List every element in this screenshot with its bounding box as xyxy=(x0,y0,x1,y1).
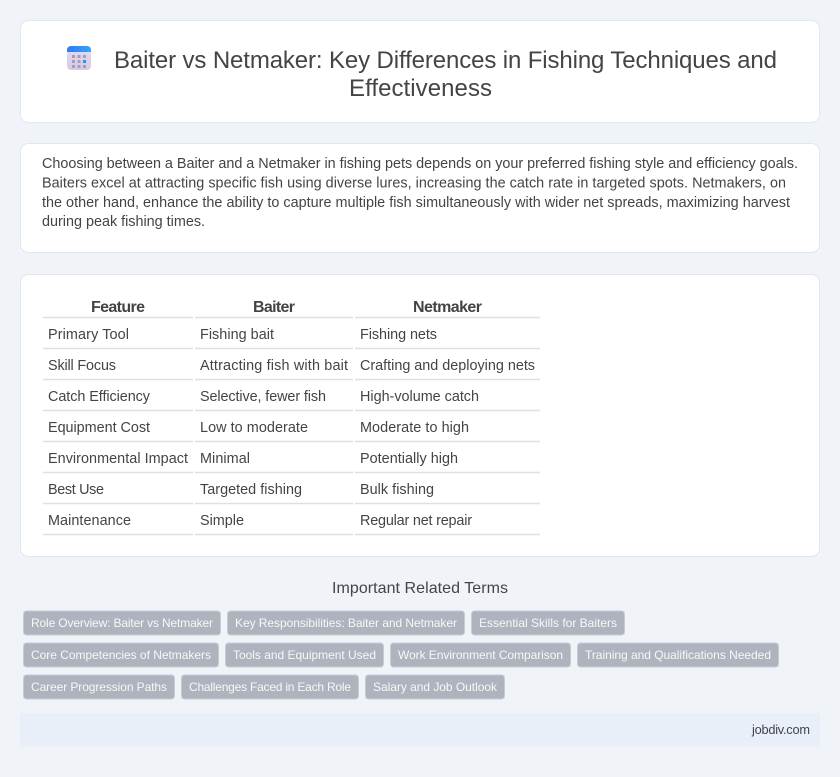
row: skill focus xyxy=(48,358,535,374)
footer source: jobdiv.com xyxy=(751,722,810,737)
tag: tools and equipment xyxy=(226,643,384,667)
row: best use xyxy=(48,482,434,498)
intro paragraph: during peak fishing times. xyxy=(42,214,205,230)
row: equipment cost xyxy=(48,420,469,436)
tag: salary: Salary and Job Outlook xyxy=(373,680,498,694)
intro text panel xyxy=(20,144,820,252)
row: skill focus: Attracting fish with bait xyxy=(200,358,348,374)
intro paragraph: the other hand, enhance the ability to capture multiple fish simultaneously with wider net spreads, maximizing harvest xyxy=(42,195,790,211)
tag: key responsibilities: Key Responsibilities: Baiter and Netmaker xyxy=(235,616,457,630)
row: equipment cost: Equipment Cost xyxy=(48,420,150,436)
row: environmental impact: Minimal xyxy=(200,451,250,467)
tag: role overview xyxy=(24,611,220,635)
tag: essential skills xyxy=(472,611,624,635)
table header: Netmaker xyxy=(413,299,482,316)
title: Effectiveness xyxy=(349,75,492,102)
intro paragraph: Choosing between a Baiter and a Netmaker in fishing pets depends on your preferred fishing style and efficiency goals. xyxy=(42,156,798,172)
row: catch efficiency: Selective, fewer fish xyxy=(200,389,326,405)
row: primary tool: Fishing bait xyxy=(200,327,274,343)
tag: core competencies: Core Competencies of Netmakers xyxy=(31,648,211,662)
row: best use: Targeted fishing xyxy=(200,482,302,498)
row: maintenance xyxy=(48,513,472,529)
intro paragraph xyxy=(42,156,798,230)
tag: core competencies xyxy=(24,643,218,667)
tag: role overview: Role Overview: Baiter vs Netmaker xyxy=(31,616,213,630)
related terms tags xyxy=(24,611,778,699)
intro paragraph: Baiters excel at attracting specific fish using diverse lures, increasing the catch rate in targeted spots. Netmakers, on xyxy=(42,176,786,192)
tag: career progression xyxy=(24,675,174,699)
row: primary tool xyxy=(48,327,437,343)
comparison table panel xyxy=(20,274,820,556)
row: primary tool: Primary Tool xyxy=(48,327,129,343)
table header: Feature xyxy=(91,299,145,316)
row: environmental impact xyxy=(48,451,458,467)
table header: Baiter xyxy=(253,299,295,316)
row: equipment cost: Moderate to high xyxy=(360,420,469,436)
row: maintenance: Regular net repair xyxy=(360,513,472,529)
tag: work environment xyxy=(390,643,570,667)
row: environmental impact: Potentially high xyxy=(360,451,458,467)
footer bar xyxy=(20,713,820,747)
tag: work environment: Work Environment Comparison xyxy=(398,648,563,662)
table header xyxy=(91,299,482,316)
tag: tools and equipment: Tools and Equipment Used xyxy=(233,648,376,662)
tag: challenges xyxy=(182,675,358,699)
row: equipment cost: Low to moderate xyxy=(200,420,308,436)
row: maintenance: Simple xyxy=(200,513,244,529)
tag: career progression: Career Progression Paths xyxy=(31,680,167,694)
title xyxy=(114,47,777,102)
tag: training and qualifications: Training and Qualifications Needed xyxy=(585,648,771,662)
row: best use: Bulk fishing xyxy=(360,482,434,498)
title: Baiter vs Netmaker: Key Differences in Fishing Techniques and xyxy=(114,47,777,74)
related terms heading: Important Related Terms xyxy=(332,580,508,597)
row: catch efficiency: Catch Efficiency xyxy=(48,389,151,405)
row: environmental impact: Environmental Impact xyxy=(48,451,188,467)
tag: salary xyxy=(366,675,504,699)
header panel xyxy=(20,20,820,122)
row: skill focus: Crafting and deploying nets xyxy=(360,358,535,374)
tag: challenges: Challenges Faced in Each Role xyxy=(189,680,351,694)
tag: training and qualifications xyxy=(578,643,778,667)
row: best use: Best Use xyxy=(48,482,104,498)
row: maintenance: Maintenance xyxy=(48,513,131,529)
row: primary tool: Fishing nets xyxy=(360,327,437,343)
row: catch efficiency xyxy=(48,389,479,405)
tag: key responsibilities xyxy=(228,611,464,635)
row: skill focus: Skill Focus xyxy=(48,358,116,374)
tag: essential skills: Essential Skills for Baiters xyxy=(479,616,617,630)
icon: calendar xyxy=(67,46,91,70)
row: catch efficiency: High-volume catch xyxy=(360,389,479,405)
